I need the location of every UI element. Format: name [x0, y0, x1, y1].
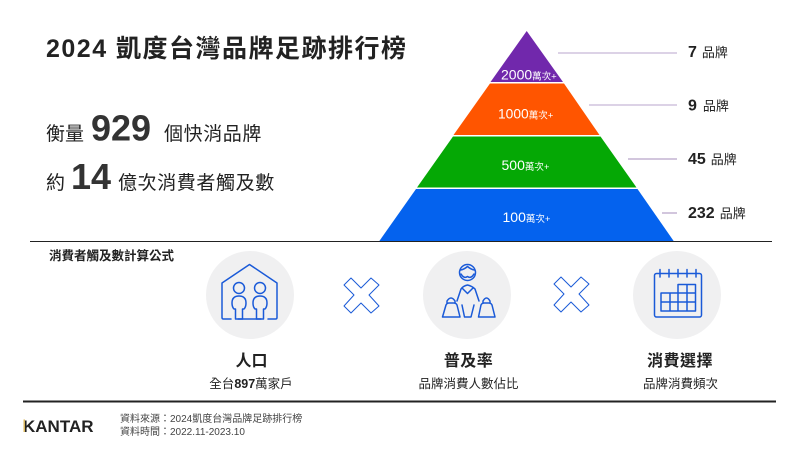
sublabel: 品牌消費人數佔比 [418, 376, 519, 391]
stat: 1.4 billion reach: 億次消費者觸及數 [118, 172, 275, 194]
logo: Kantar: KANTAR [23, 417, 94, 436]
source note: 資料來源：2024凱度台灣品牌足跡排行榜 [120, 412, 302, 425]
formula item: population [206, 251, 294, 391]
divider [30, 240, 772, 242]
tier: 1000萬次+: 1000萬次+ [498, 106, 554, 122]
tier: 500萬次+: 500萬次+ [502, 157, 550, 173]
formula heading: 消費者觸及數計算公式 [49, 248, 175, 263]
formula item: penetration [418, 251, 519, 391]
icon: house with people [206, 251, 294, 339]
footer rule [23, 400, 776, 402]
stat: 929 brands: 衡量 [46, 123, 84, 145]
stat: 1.4 billion reach: 約 [46, 172, 65, 194]
sublabel: 品牌消費頻次 [643, 376, 718, 391]
pyramid labels: 9 品牌 [688, 98, 729, 114]
source note [120, 412, 302, 438]
source note: 資料時間：2022.11-2023.10 [120, 425, 245, 438]
label: 消費選擇: 消費選擇 [647, 352, 713, 370]
tier: 100萬次+: 100萬次+ [502, 209, 551, 225]
pyramid labels: 45 品牌 [688, 151, 737, 168]
tier: 2000萬次+ [490, 31, 563, 82]
multiply sign 1 [344, 278, 379, 313]
label: 普及率: 普及率 [444, 351, 493, 370]
pyramid labels [558, 44, 746, 222]
stat: 1.4 billion reach: 14 [71, 156, 111, 197]
pyramid labels: 232 品牌 [688, 205, 746, 222]
pyramid chart [379, 31, 674, 242]
stat: 929 brands [46, 108, 262, 148]
stat: 1.4 billion reach [46, 156, 275, 197]
title: 2024 凱度台灣品牌足跡排行榜 [46, 34, 408, 63]
tier: 2000萬次+: 2000萬次+ [501, 66, 557, 82]
tier: 1000萬次+ [454, 84, 600, 135]
sublabel: 全台897萬家戶 [209, 376, 293, 391]
formula item: purchase occasions [633, 251, 721, 391]
stat: 929 brands: 929 [91, 108, 151, 148]
pyramid labels: 7 品牌 [688, 44, 728, 61]
stat: 929 brands: 個快消品牌 [164, 123, 262, 145]
tier: 500萬次+ [417, 136, 636, 188]
multiply sign 2 [554, 277, 589, 312]
icon: shopper with bags [423, 251, 511, 339]
label: 人口: 人口 [235, 353, 268, 370]
tier: 100萬次+ [379, 189, 674, 242]
icon: calendar [633, 251, 721, 339]
